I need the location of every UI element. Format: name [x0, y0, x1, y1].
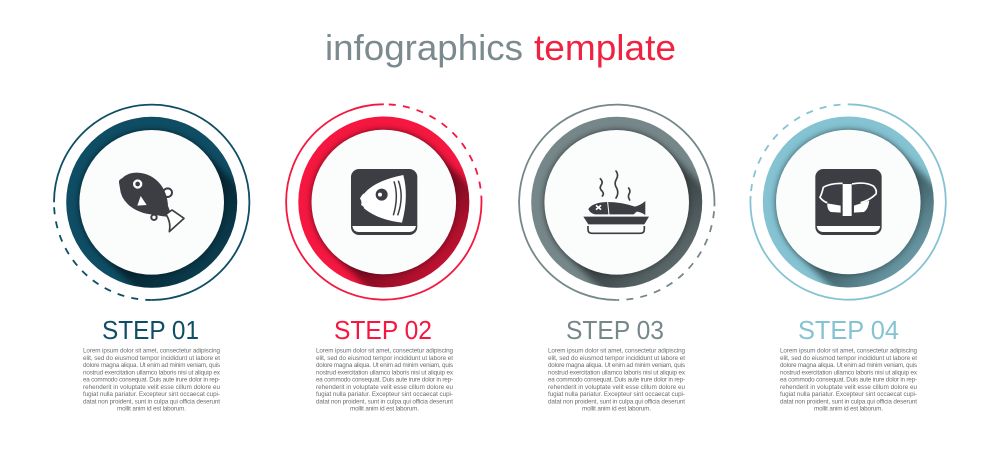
text block 01: ea commodo consequat. Duis aute irure dolor in rep- [83, 376, 220, 384]
text block 04: mollit anim id est laborum. [814, 406, 883, 412]
text block 01 [83, 348, 221, 412]
text block 03: dolore magna aliqua. Ut enim ad minim veniam, quis [548, 362, 685, 369]
text block 02: datat non proident, sunt in culpa qui officia deserunt [316, 398, 453, 405]
panel: step 02 [286, 104, 481, 413]
title: template [534, 27, 676, 68]
heading: step 03: STEP 03 [566, 315, 664, 345]
icon: sushi card [815, 169, 882, 235]
text block 02: Lorem ipsum dolor sit amet, consectetur adipiscing [316, 348, 453, 354]
heading: step 01: STEP 01 [102, 315, 199, 345]
icon: fish head card [351, 169, 417, 235]
text block 02: rehenderit in voluptate velit esse cillum dolore eu [316, 384, 453, 391]
circle badge 03 [519, 105, 714, 300]
heading: step 04: STEP 04 [798, 315, 899, 345]
text block 01: rehenderit in voluptate velit esse cillum dolore eu [83, 384, 220, 391]
circle badge 02 [286, 104, 482, 300]
text block 02: fugiat nulla pariatur. Excepteur sint occaecat cupi- [316, 391, 453, 398]
text block 01: Lorem ipsum dolor sit amet, consectetur adipiscing [83, 348, 220, 354]
text block 02: ea commodo consequat. Duis aute irure dolor in rep- [316, 376, 453, 384]
panel: step 01 [54, 105, 249, 412]
circle badge 01 [54, 105, 249, 300]
icon: steaming fish on plate [583, 171, 649, 233]
panel: step 04 [750, 104, 946, 413]
text block 04: elit, sed do eiusmod tempor incididunt ut labore et [780, 355, 917, 362]
text block 04: nostrud exercitation ullamco laboris nisi ut aliquip ex [780, 369, 918, 376]
circle badge 04 [750, 104, 946, 300]
text block 03: ea commodo consequat. Duis aute irure dolor in rep- [548, 376, 685, 384]
text block 03: fugiat nulla pariatur. Excepteur sint occaecat cupi- [548, 391, 685, 398]
text block 04 [780, 348, 918, 412]
text block 04: dolore magna aliqua. Ut enim ad minim veniam, quis [780, 362, 917, 369]
text block 01: mollit anim id est laborum. [117, 406, 186, 412]
text block 04: fugiat nulla pariatur. Excepteur sint occaecat cupi- [780, 391, 917, 398]
text block 03: nostrud exercitation ullamco laboris nisi ut aliquip ex [548, 369, 686, 376]
icon: puffer fish [119, 173, 184, 232]
text block 02 [316, 348, 454, 412]
text block 02: mollit anim id est laborum. [350, 406, 419, 412]
text block 02: nostrud exercitation ullamco laboris nisi ut aliquip ex [316, 369, 454, 376]
text block 03: elit, sed do eiusmod tempor incididunt ut labore et [548, 355, 685, 362]
text block 03 [548, 348, 686, 412]
text block 03: mollit anim id est laborum. [582, 406, 651, 412]
text block 04: Lorem ipsum dolor sit amet, consectetur adipiscing [780, 348, 917, 354]
text block 01: datat non proident, sunt in culpa qui officia deserunt [83, 398, 220, 405]
text block 01: nostrud exercitation ullamco laboris nisi ut aliquip ex [83, 369, 221, 376]
text block 02: dolore magna aliqua. Ut enim ad minim veniam, quis [316, 362, 453, 369]
panel: step 03 [519, 105, 714, 413]
text block 04: rehenderit in voluptate velit esse cillum dolore eu [780, 384, 917, 391]
text block 04: datat non proident, sunt in culpa qui officia deserunt [780, 398, 917, 405]
title [325, 27, 676, 68]
text block 01: fugiat nulla pariatur. Excepteur sint occaecat cupi- [83, 391, 220, 398]
text block 02: elit, sed do eiusmod tempor incididunt ut labore et [316, 355, 453, 362]
heading: step 02: STEP 02 [334, 315, 432, 345]
text block 01: dolore magna aliqua. Ut enim ad minim veniam, quis [83, 362, 220, 369]
title: infographics [325, 27, 523, 68]
text block 01: elit, sed do eiusmod tempor incididunt ut labore et [83, 355, 220, 362]
text block 04: ea commodo consequat. Duis aute irure dolor in rep- [780, 376, 917, 384]
text block 03: datat non proident, sunt in culpa qui officia deserunt [548, 398, 685, 405]
text block 03: Lorem ipsum dolor sit amet, consectetur adipiscing [548, 348, 685, 354]
text block 03: rehenderit in voluptate velit esse cillum dolore eu [548, 384, 685, 391]
